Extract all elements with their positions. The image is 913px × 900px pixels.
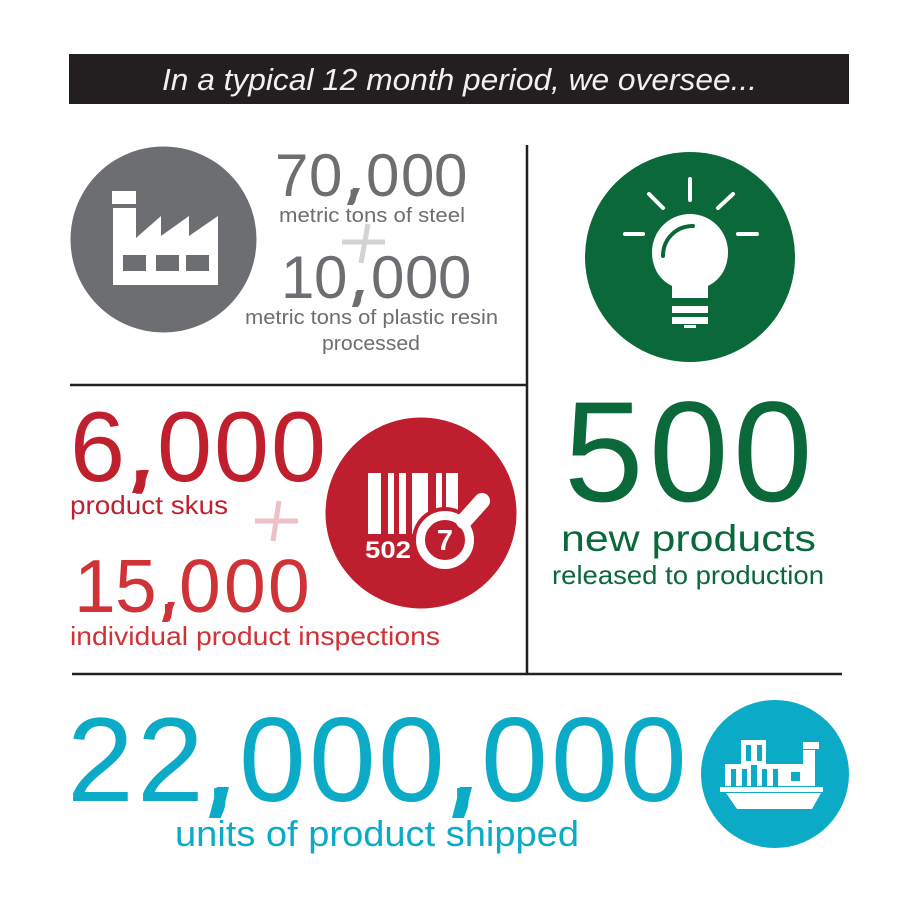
stat: 15,000 inspections: individual product inspections xyxy=(70,621,440,651)
stat: 22,000,000 units: units of product shipped xyxy=(175,813,579,854)
stat: 6,000 skus: product skus xyxy=(70,490,228,520)
stat: 10,000 plastic resin: metric tons of plastic resin xyxy=(245,307,498,329)
icon: light bulb xyxy=(585,152,795,362)
panel: new products xyxy=(552,152,824,590)
icon: container ship xyxy=(701,700,849,848)
stat: 500 new products xyxy=(552,373,824,590)
stat: 10,000 plastic resin: processed xyxy=(322,333,420,355)
stat: 500 new products: released to production xyxy=(552,560,824,590)
stat: 10,000 plastic resin: 10,000 xyxy=(281,244,471,311)
stat: 6,000 skus: 6,000 xyxy=(70,391,326,502)
panel: materials processed xyxy=(70,142,498,355)
title banner xyxy=(69,54,849,104)
stat: 15,000 inspections xyxy=(70,544,440,651)
icon: barcode with magnifier: 7 xyxy=(437,525,453,557)
plus sign: grey xyxy=(342,224,385,263)
panel: units shipped xyxy=(67,693,849,854)
plus sign: pink xyxy=(255,501,298,541)
icon: barcode with magnifier xyxy=(326,418,516,608)
stat: 500 new products: 500 xyxy=(564,373,813,532)
title banner: In a typical 12 month period, we oversee... xyxy=(162,62,757,97)
stat: 500 new products: new products xyxy=(561,518,816,559)
icon: barcode with magnifier: 502 xyxy=(365,537,411,564)
stat: 10,000 plastic resin xyxy=(245,244,498,355)
panel: product inspections xyxy=(70,391,516,651)
stat: 22,000,000 units: 22,000,000 xyxy=(67,693,687,827)
stat: 70,000 steel: 70,000 xyxy=(275,142,467,209)
stat: 70,000 steel: metric tons of steel xyxy=(279,205,465,227)
stat: 15,000 inspections: 15,000 xyxy=(74,544,310,628)
icon: factory xyxy=(70,146,256,332)
